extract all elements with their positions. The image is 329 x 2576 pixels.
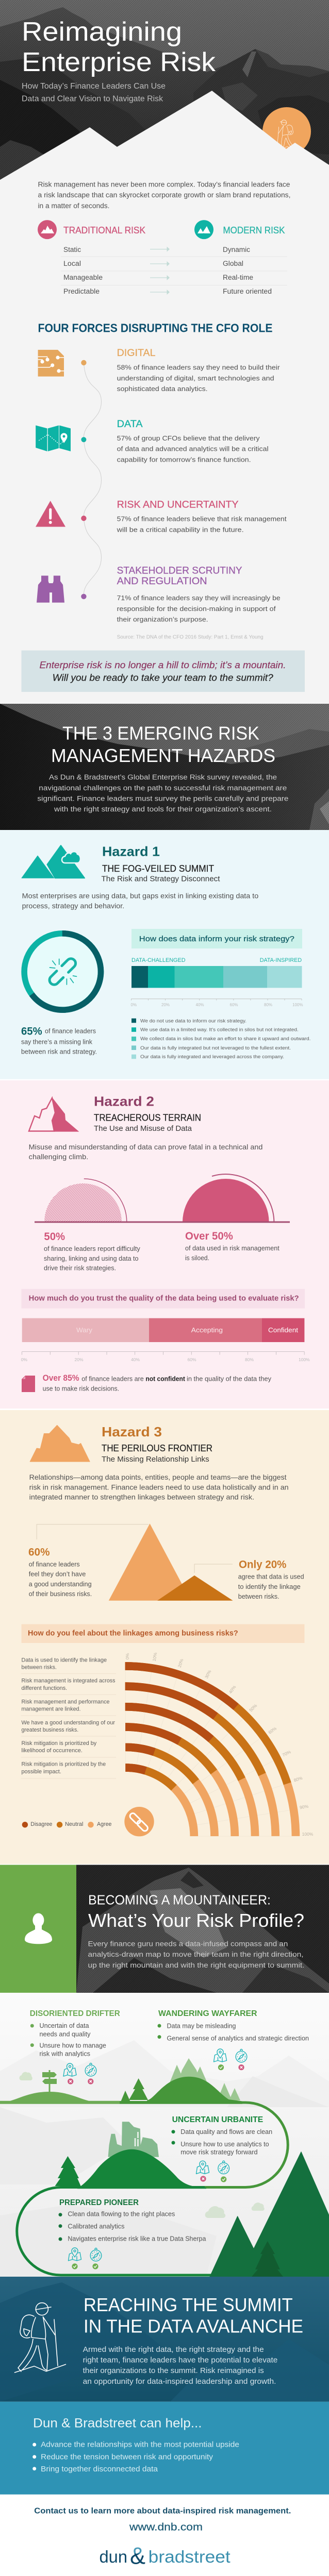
bullets: Data may be misleading: [167, 2022, 236, 2029]
stat: 50%: sharing, linking and using data to: [44, 1255, 138, 1262]
title: Reimagining: [22, 17, 182, 47]
stat: 65%: of finance leaders: [45, 1028, 96, 1035]
radial bar chart: 0%: [125, 1653, 130, 1659]
logo: bradstreet: [149, 2547, 231, 2566]
chart labels: Risk mitigation is prioritized by: [22, 1740, 97, 1747]
heading: reaching the summit: IN THE DATA AVALANCHE: [84, 2316, 303, 2337]
subheading: TREACHEROUS TERRAIN: [94, 1113, 201, 1123]
text: hazards intro: [37, 773, 288, 813]
heading: UNCERTAIN URBANITE: [172, 2115, 264, 2124]
text: stakeholder: [117, 594, 281, 623]
stacked bar chart: 60%: [230, 1003, 238, 1007]
bullets: Advance the relationships with the most potential upside: [41, 2440, 239, 2449]
intro text: [38, 181, 291, 210]
logo: &: [130, 2542, 145, 2569]
icon: circuit document: [38, 350, 64, 377]
bullets: [59, 2211, 206, 2243]
mountains: [210, 2152, 329, 2277]
text: reaching the summit: Armed with the right data, the right strategy and the: [83, 2345, 264, 2354]
bullets: [158, 2022, 309, 2042]
legend: We use data in a limited way. It’s collected in silos but not integrated.: [140, 1027, 299, 1033]
stacked bar chart: 40%: [196, 1003, 204, 1007]
bullets: [32, 2440, 239, 2473]
winding path band: [204, 2103, 288, 2188]
stat: over 85%: use to make risk decisions.: [43, 1385, 119, 1393]
heading: hazard 1: Hazard 1: [102, 843, 160, 859]
stacked bar chart: 100%: [292, 1003, 303, 1007]
timeline dot: [81, 516, 87, 521]
stat: 50%: 50%: [44, 1231, 65, 1243]
winding path band: [17, 2188, 217, 2275]
stat: only 20%: agree that data is used: [238, 1573, 304, 1581]
heading: four forces: FOUR FORCES DISRUPTING THE CFO ROLE: [38, 321, 272, 335]
radial bar chart: 40%: [228, 1684, 237, 1694]
source note: Source: The DNA of the CFO 2016 Study: Part 1, Ernst & Young: [117, 634, 264, 640]
legend: We do not use data to inform our risk strategy.: [140, 1018, 246, 1024]
subtitle: Data and Clear Vision to Navigate Risk: [22, 95, 163, 103]
icon: person: [25, 1913, 52, 1944]
table labels: Global: [223, 260, 243, 267]
text: data: [117, 434, 269, 463]
legend: Our data is fully integrated but not leveraged to the fullest extent.: [140, 1045, 291, 1051]
text: hazard 3: risk in risk management. Finance leaders need to use data holistically and in an: [29, 1483, 289, 1491]
subheading: The Use and Misuse of Data: [94, 1125, 192, 1133]
table labels: Future oriented: [223, 287, 272, 295]
text: hazard 3: [29, 1473, 289, 1501]
stacked bar chart: trust: 40%: [131, 1357, 140, 1362]
chart labels: between risks.: [22, 1665, 57, 1671]
panel: hazards intro photo: [0, 704, 329, 830]
bullets: Uncertain of data: [39, 2022, 89, 2029]
chart labels: Risk management and performance: [22, 1699, 109, 1705]
stat: over 85%: Over 85%: [43, 1373, 79, 1383]
icon: chain link: [124, 1807, 154, 1836]
heading: 3 emerging hazards: MANAGEMENT HAZARDS: [51, 745, 275, 766]
timeline line: [84, 363, 101, 597]
subheading: THE PERILOUS FRONTIER: [102, 1443, 212, 1453]
text: data: of data and advanced analytics will be a critical: [117, 445, 269, 452]
stat: over 50%: [185, 1230, 279, 1262]
legend: Disagree: [30, 1821, 52, 1827]
panel: hazard 1: [0, 830, 329, 1079]
stacked bar chart: trust: 20%: [74, 1357, 84, 1362]
bullets: needs and quality: [39, 2031, 91, 2038]
icon: document: [22, 1376, 35, 1392]
text: risk and uncertainty: 57% of finance leaders believe that risk management: [117, 515, 287, 522]
heading: risk and uncertainty: RISK AND UNCERTAINTY: [117, 499, 239, 510]
icon: perilous mountain: [30, 1425, 90, 1462]
heading: modern risk: MODERN RISK: [223, 225, 285, 235]
table labels: [63, 246, 272, 295]
heading: 3 emerging hazards: THE 3 EMERGING RISK: [62, 723, 259, 744]
panel: risk and uncertainty: [36, 499, 287, 533]
stat: 60%: of their business risks.: [29, 1590, 92, 1598]
text: reaching the summit: [83, 2345, 277, 2386]
legend: [22, 1821, 112, 1827]
heading: reaching the summit: [84, 2294, 303, 2337]
stat: 60%: feel they don’t have: [29, 1570, 86, 1578]
panel: hazard 2: [0, 1080, 329, 1409]
bullets: Reduce the tension between risk and opportunity: [41, 2452, 213, 2461]
bullets: move risk strategy forward: [180, 2149, 258, 2156]
profile: uncertain urbanite: [17, 2115, 272, 2275]
hill with ground: [0, 2092, 120, 2104]
bullets: Bring together disconnected data: [41, 2465, 158, 2473]
icon: warning triangle: [36, 501, 65, 527]
stat: over 85%: in the quality of the data they: [187, 1375, 271, 1383]
stacked bar chart: trust: 100%: [299, 1357, 310, 1362]
table labels: Real-time: [223, 274, 253, 281]
text: hazard 1: process, strategy and behavior.: [22, 902, 124, 910]
subheading: The Missing Relationship Links: [102, 1455, 209, 1464]
intro text: a risk landscape that can skyrocket corporate growth or slam brand reputations,: [38, 191, 291, 199]
icon: modern risk: [194, 220, 213, 239]
clouds: [205, 2202, 265, 2218]
hill with ground: [120, 2077, 242, 2104]
question box: [22, 1289, 305, 1309]
heading: hazard 3: Hazard 3: [102, 1424, 162, 1439]
stacked bar chart: 0%: [131, 1003, 137, 1007]
bullets: Calibrated analytics: [68, 2223, 124, 2230]
heading: data: DATA: [117, 419, 143, 430]
text: hazard 3: integrated manner to strengthen linkages between strategy and risk.: [29, 1493, 254, 1501]
icon: treacherous mountain: [29, 1097, 79, 1132]
icon: cloud: [20, 2072, 32, 2080]
heading: becoming a mountaineer: BECOMING A MOUNTAINEER:: [88, 1892, 271, 1907]
stacked bar chart: trust: 0%: [21, 1357, 27, 1362]
text: digital: [117, 364, 280, 393]
row dividers and arrows: [61, 247, 287, 295]
profile: wandering wayfarer: [120, 2009, 309, 2188]
stat: only 20%: to identify the linkage: [238, 1583, 301, 1590]
intro text: Risk management has never been more complex. Today’s financial leaders face: [38, 181, 290, 189]
logo: [99, 2542, 231, 2569]
panel: dun and bradstreet can help: [0, 2402, 329, 2495]
icons: map and compass, yes and yes: [68, 2248, 102, 2269]
stat: over 50%: is siloed.: [185, 1254, 209, 1262]
radial bar chart: 10%: [152, 1652, 158, 1662]
text: data: capability for tomorrow’s finance function.: [117, 455, 251, 463]
radial bar chart: [0, 1652, 314, 2006]
text: risk profile: [88, 1940, 304, 1969]
chart labels: greatest business risks.: [22, 1727, 78, 1733]
stat: 65%: between risk and strategy.: [21, 1048, 97, 1055]
text: digital: sophisticated data analytics.: [117, 385, 208, 393]
text: reaching the summit: right team, finance leaders have the potential to elevate: [83, 2356, 277, 2365]
text: hazard 3: Relationships—among data points, entities, people and teams—are the biggest: [29, 1473, 287, 1481]
intro text: in a matter of seconds.: [38, 202, 109, 210]
radial bar chart: 100%: [302, 1832, 314, 1837]
chart labels: likelihood of occurrence.: [22, 1748, 83, 1754]
radial bar chart: 70%: [282, 1749, 292, 1758]
bullets: [171, 2128, 272, 2156]
text: hazard 1: [22, 892, 259, 910]
heading: digital: DIGITAL: [117, 348, 156, 359]
text: hazard 2: [29, 1143, 262, 1161]
stat: 60%: a good understanding: [29, 1580, 92, 1588]
title: Enterprise Risk: [22, 47, 216, 77]
table labels: Local: [63, 260, 81, 267]
icon: foggy mountains: [22, 845, 85, 878]
radial bar chart: 20%: [177, 1658, 185, 1668]
text: risk profile: up the right mountain and with the right equipment to summit.: [88, 1961, 304, 1969]
green side panel: [0, 1865, 76, 1993]
heading: stakeholder: AND REGULATION: [117, 576, 207, 587]
chart labels: We have a good understanding of our: [22, 1720, 115, 1726]
panel: risk profile banner: [0, 1865, 329, 1993]
stat: 50%: of finance leaders report difficulty: [44, 1245, 140, 1252]
stat: 60%: of finance leaders: [29, 1561, 80, 1568]
heading: traditional risk: TRADITIONAL RISK: [63, 225, 146, 235]
chart labels: [21, 1657, 116, 1778]
table labels: Dynamic: [223, 246, 250, 253]
text: hazard 2: challenging climb.: [29, 1153, 88, 1161]
text: hazards intro: with the right strategy and tools for their organization’s ascent.: [54, 805, 272, 813]
text: reaching the summit: their organizations to the summit. Risk reimagined is: [83, 2366, 264, 2375]
text: hazard 1: Most enterprises are using data, but gaps exist in linking existing data to: [22, 892, 259, 900]
text: hazards intro: As Dun & Bradstreet’s Global Enterprise Risk survey revealed, the: [49, 773, 277, 781]
text: digital: understanding of digital, smart technologies and: [117, 375, 274, 382]
legend: Agree: [97, 1821, 111, 1827]
heading: stakeholder: [117, 566, 242, 587]
question box: How does data inform your risk strategy?: [139, 935, 294, 943]
icon: hiker: [14, 2303, 65, 2372]
dark tree: [252, 2241, 283, 2277]
panel: light mountain background: [0, 91, 329, 704]
chart: two mountains: [37, 1523, 233, 1601]
heading: WANDERING WAYFARER: [158, 2009, 257, 2018]
question box: How do you feel about the linkages among business risks?: [28, 1629, 238, 1638]
legend: We collect data in silos but make an effort to share it upward and outward.: [140, 1036, 310, 1042]
legend: [131, 1018, 310, 1060]
timeline dot: [81, 360, 87, 365]
panel: traditional vs modern risk table: [38, 220, 287, 295]
logo: dun: [99, 2547, 127, 2566]
heading: reaching the summit: REACHING THE SUMMIT: [84, 2294, 293, 2315]
panel: risk profiles journey: [0, 1993, 329, 2277]
stat: over 85%: not confident: [145, 1375, 186, 1383]
timeline dot: [81, 437, 86, 442]
panel: reaching the summit: [0, 2277, 329, 2402]
profile: prepared pioneer: [59, 2152, 329, 2277]
title: [22, 17, 216, 77]
legend: Our data is fully integrated and leveraged across the company.: [140, 1054, 284, 1060]
question box: How much do you trust the quality of the data being used to evaluate risk?: [29, 1295, 299, 1303]
text: reaching the summit: an opportunity for data-inspired leadership and growth.: [83, 2377, 276, 2386]
bullets: General sense of analytics and strategic direction: [167, 2035, 309, 2042]
chart labels: Risk management is integrated across: [22, 1678, 116, 1684]
stat: 50%: drive their risk strategies.: [44, 1264, 116, 1272]
city skyline: [108, 2122, 159, 2157]
heading: stakeholder: STAKEHOLDER SCRUTINY: [117, 566, 242, 576]
profile: disoriented drifter: [0, 2009, 120, 2104]
callout: [22, 650, 305, 692]
table labels: Static: [63, 246, 81, 253]
icon: traditional risk: [38, 220, 57, 239]
panel: data: [36, 419, 269, 463]
text: risk profile: analytics-drawn map to move their team in the right direction,: [88, 1951, 303, 1958]
panel: header photo: [0, 0, 329, 185]
legend: Neutral: [65, 1821, 83, 1827]
panel: stakeholder scrutiny: [37, 566, 281, 623]
tree: [55, 2156, 81, 2186]
chart: half domes: [35, 1174, 290, 1223]
heading: becoming a mountaineer: [88, 1892, 304, 1931]
stacked bar chart: trust: Wary: [76, 1326, 93, 1334]
stat: 50%: [44, 1231, 140, 1272]
text: data: 57% of group CFOs believe that the delivery: [117, 434, 260, 442]
bullets: [30, 2022, 106, 2057]
radial bar chart: 90%: [299, 1804, 309, 1810]
stat: over 50%: of data used in risk management: [185, 1244, 279, 1252]
heading: PREPARED PIONEER: [59, 2198, 139, 2207]
stacked bar chart: trust: 60%: [188, 1357, 196, 1362]
text: hazards intro: significant. Finance leaders must survey the perils carefully and prepare: [37, 795, 288, 803]
bullets: risk with analytics: [39, 2050, 90, 2057]
stacked bar chart: DATA-CHALLENGED: [131, 957, 186, 963]
stacked bar chart: [131, 957, 303, 1007]
icon: broken link: [47, 957, 77, 987]
heading: hazard 2: Hazard 2: [94, 1093, 154, 1109]
icon: signpost: [42, 2070, 57, 2093]
stat: only 20%: between risks.: [238, 1592, 279, 1600]
contact line: Contact us to learn more about data-inspired risk management.: [34, 2506, 291, 2515]
table labels: Predictable: [63, 287, 100, 295]
chart labels: different functions.: [22, 1685, 67, 1691]
stat: 65%: say there’s a missing link: [21, 1039, 93, 1046]
timeline dot: [81, 594, 87, 599]
stacked bar chart: DATA-INSPIRED: [260, 957, 302, 963]
radial bar chart: 60%: [267, 1725, 277, 1735]
table labels: Manageable: [63, 274, 103, 281]
text: digital: 58% of finance leaders say they need to build their: [117, 364, 280, 371]
stat: 65%: [21, 1025, 97, 1055]
bullets: Unsure how to use analytics to: [180, 2141, 269, 2148]
bullets: Data quality and flows are clean: [180, 2128, 272, 2136]
text: stakeholder: responsible for the decision-making in support of: [117, 605, 276, 613]
icon: orange circle with hiker: [262, 107, 311, 156]
text: stakeholder: 71% of finance leaders say they will increasingly be: [117, 594, 281, 602]
stacked bar chart: trust: [21, 1318, 310, 1362]
stacked bar chart: trust: 80%: [245, 1357, 254, 1362]
heading: Dun & Bradstreet can help...: [33, 2416, 202, 2431]
stat: over 85%: [43, 1373, 271, 1393]
chart labels: Data is used to identify the linkage: [22, 1657, 107, 1663]
text: risk and uncertainty: [116, 515, 287, 533]
text: stakeholder: their organization’s purpose.: [117, 615, 208, 623]
text: risk and uncertainty: will be a critical capability in the future.: [116, 526, 244, 533]
icons: map and compass, no and yes: [196, 2161, 229, 2182]
text: hazards intro: navigational challenges on the path to successful risk management are: [39, 784, 287, 792]
radial bar chart: 30%: [204, 1669, 212, 1679]
subtitle: [22, 82, 166, 103]
icons: map and compass, no and no: [63, 2063, 96, 2084]
radial bar chart: 50%: [248, 1703, 258, 1713]
subheading: The Risk and Strategy Disconnect: [101, 875, 220, 884]
dark trees: [120, 2078, 148, 2103]
chart labels: management are linked.: [22, 1706, 80, 1712]
stat: only 20%: Only 20%: [239, 1559, 287, 1571]
stacked bar chart: trust: Confident: [268, 1326, 298, 1334]
stat: 65%: 65%: [21, 1025, 42, 1037]
stat: 60%: [28, 1546, 92, 1598]
light trees: [169, 2058, 240, 2100]
text: hazard 2: Misuse and misunderstanding of data can prove fatal in a technical and: [29, 1143, 262, 1151]
bullets: Clean data flowing to the right places: [68, 2211, 175, 2218]
subtitle: How Today’s Finance Leaders Can Use: [22, 82, 166, 91]
subheading: THE FOG-VEILED SUMMIT: [102, 863, 214, 874]
stat: 60%: 60%: [28, 1546, 50, 1558]
heading: 3 emerging hazards: [51, 723, 275, 766]
callout: Enterprise risk is no longer a hill to climb; it’s a mountain.: [39, 660, 286, 670]
icon: binoculars: [37, 575, 64, 603]
stacked bar chart: trust: Accepting: [191, 1326, 223, 1334]
heading: DISORIENTED DRIFTER: [30, 2009, 120, 2018]
stat: only 20%: [238, 1559, 304, 1600]
chart labels: Risk mitigation is prioritized by the: [22, 1761, 106, 1767]
question box: [22, 1624, 304, 1643]
panel: digital: [38, 348, 280, 393]
chart labels: possible impact.: [22, 1769, 61, 1775]
panel: hazard 3: [0, 1410, 329, 2006]
website: www.dnb.com: [129, 2522, 203, 2533]
icon: map: [36, 426, 71, 451]
stacked bar chart: 80%: [264, 1003, 272, 1007]
question box: [131, 929, 302, 948]
bullets: Unsure how to manage: [39, 2042, 106, 2049]
hill with ground: [77, 2149, 206, 2189]
bullets: Navigates enterprise risk like a true Data Sherpa: [68, 2235, 206, 2243]
stacked bar chart: 20%: [161, 1003, 170, 1007]
text: risk profile: Every finance guru needs a data-infused compass and an: [88, 1940, 288, 1947]
stat: over 85%: of finance leaders are: [81, 1375, 144, 1383]
donut chart: 65%: [24, 934, 101, 1010]
callout: Will you be ready to take your team to the summit?: [53, 672, 273, 683]
radial bar chart: 80%: [293, 1775, 303, 1783]
stat: over 50%: Over 50%: [185, 1230, 233, 1242]
heading: becoming a mountaineer: What’s Your Risk Profile?: [88, 1910, 304, 1931]
icons: map and compass, yes and no: [213, 2049, 247, 2070]
